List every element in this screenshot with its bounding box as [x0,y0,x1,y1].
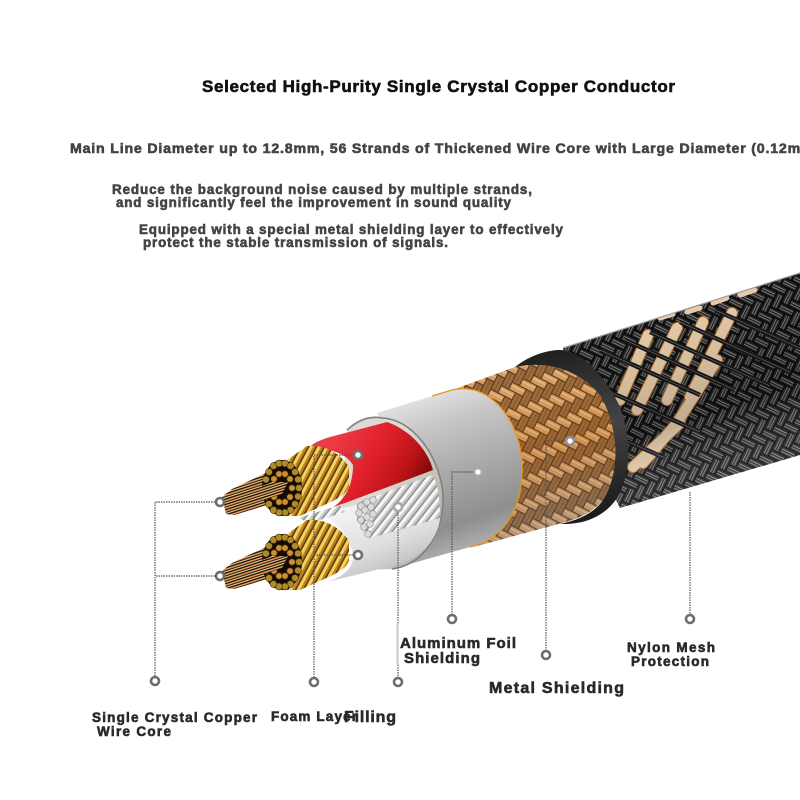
label: nylon mesh protection [627,640,715,669]
red foam layer [306,422,433,507]
label: metal shielding: Metal Shielding [489,680,624,697]
leader: metal shielding [542,437,574,659]
label: aluminum foil shielding: Shielding [404,650,480,667]
leader: nylon mesh [686,492,694,623]
copper core: lower [222,520,349,590]
white foam layer [317,505,440,582]
black collar ring [515,350,628,524]
metal shielding braid [452,365,615,548]
label: aluminum foil shielding: Aluminum Foil [400,635,516,652]
leader: foam layer [310,451,362,686]
label: nylon mesh protection: Protection [631,654,709,669]
text block: metal shielding layer [139,222,564,250]
filling strands [298,475,440,538]
text block: metal shielding layer: Equipped with a special metal shielding layer to effectively [139,222,564,237]
cable interior [340,417,443,570]
inner rim [347,417,443,569]
leader: wire core [151,498,224,685]
leader: filling [394,503,402,686]
nylon mesh protection [563,273,800,508]
text block: noise reduction: Reduce the background noise caused by multiple strands, [112,182,532,197]
text block: main line specification: Main Line Diameter up to 12.8mm, 56 Strands of Thickened Wire Core with Large Diameter (0.12mm) [70,141,800,157]
label: aluminum foil shielding [400,635,516,667]
label: single crystal copper wire core: Single Crystal Copper [92,710,258,725]
title: Selected High-Purity Single Crystal Copper Conductor [202,77,675,96]
label: filling: Filling [344,709,396,726]
illustration: cable cross-section [222,273,800,590]
label: single crystal copper wire core: Wire Core [97,724,171,739]
copper core: upper [222,446,349,516]
label: nylon mesh protection: Nylon Mesh [627,640,715,655]
text block: metal shielding layer: protect the stable transmission of signals. [143,235,448,250]
label: foam layer: Foam Layer [271,709,358,724]
leader: aluminum foil [448,468,482,623]
aluminum foil shielding [377,389,522,569]
text block: noise reduction: and significantly feel the improvement in sound quality [116,195,512,210]
label: single crystal copper wire core [92,710,258,739]
text block: noise reduction [112,182,532,210]
